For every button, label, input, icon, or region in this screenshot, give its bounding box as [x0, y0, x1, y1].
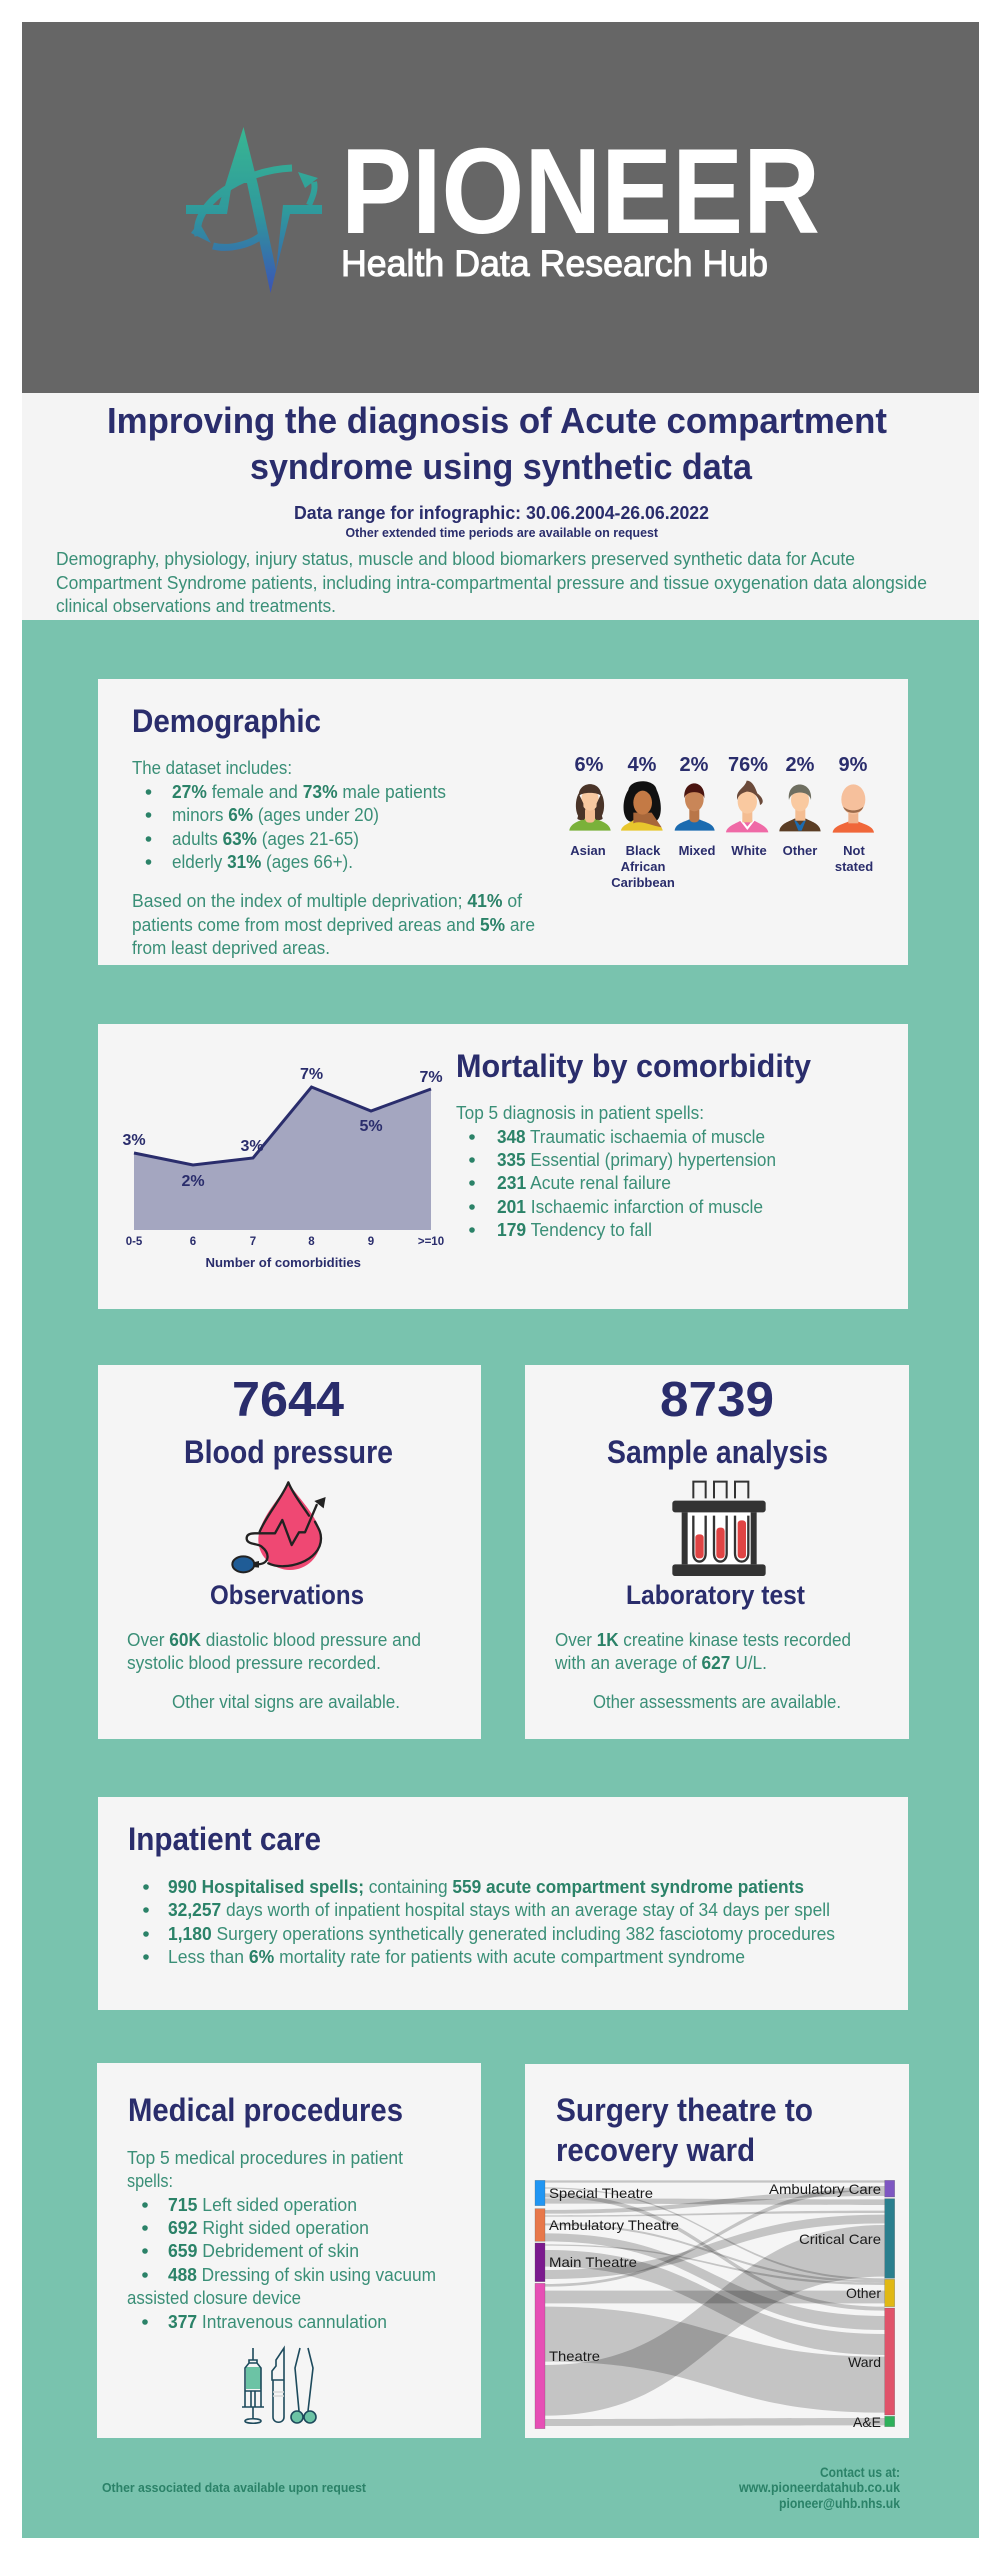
diagnosis list: 201 Ischaemic infarction of muscle [497, 1197, 763, 1217]
ethnicity labels [570, 843, 873, 890]
procedures list: 692 Right sided operation [168, 2218, 369, 2238]
diagnosis list: 335 Essential (primary) hypertension [497, 1150, 776, 1170]
inpatient list: 990 Hospitalised spells; containing 559 acute compartment syndrome patients [168, 1877, 804, 1897]
area chart: 8 [308, 1236, 315, 1248]
deprivation text: patients come from most deprived areas and 5% are [132, 915, 535, 935]
sankey labels: Ambulatory Theatre [549, 2217, 679, 2233]
area chart: 2% [181, 1173, 205, 1190]
header banner [22, 22, 979, 393]
procedures list: 377 Intravenous cannulation [168, 2312, 387, 2332]
sankey labels: A&E [853, 2414, 881, 2430]
observations text [127, 1630, 421, 1712]
dataset list: The dataset includes: [132, 758, 292, 778]
laboratory text: Over 1K creatine kinase tests recorded [555, 1630, 851, 1650]
deprivation text: Based on the index of multiple deprivation; 41% of [132, 891, 523, 911]
data range: Other extended time periods are available on request [346, 525, 659, 540]
ethnicity labels: Black [626, 843, 661, 858]
contact details: pioneer@uhb.nhs.uk [779, 2496, 900, 2511]
panel: mortality by comorbidity [98, 1024, 908, 1309]
deprivation text: from least deprived areas. [132, 938, 330, 958]
icon: surgical instruments [242, 2348, 316, 2423]
data range: Data range for infographic: 30.06.2004-26.06.2022 [294, 503, 709, 523]
ethnicity labels: Other [783, 843, 817, 858]
area chart: 6 [190, 1236, 196, 1248]
ethnicity labels: White [731, 843, 767, 858]
sankey diagram [535, 2180, 895, 2430]
ethnicity labels: stated [835, 859, 873, 874]
sankey links [545, 2180, 885, 2426]
area chart: 3% [240, 1138, 264, 1155]
area chart: 7 [250, 1236, 256, 1248]
ethnicity labels: African [621, 859, 665, 874]
procedures list: Top 5 medical procedures in patient [127, 2148, 403, 2168]
icon: pioneer logo mark [186, 127, 322, 293]
heading: surgery theatre [556, 2092, 813, 2168]
ethnicity labels: Mixed [679, 843, 715, 858]
intro paragraph [56, 549, 927, 616]
icon: test tube rack [672, 1482, 766, 1576]
heading: surgery theatre: recovery ward [556, 2132, 755, 2168]
area chart: 7% [300, 1066, 323, 1083]
panel: surgery theatre to recovery ward [525, 2064, 909, 2438]
dataset list: minors 6% (ages under 20) [172, 805, 379, 825]
ethnicity percentages: 4% [628, 754, 657, 776]
observations text: systolic blood pressure recorded. [127, 1653, 381, 1673]
procedures list: 715 Left sided operation [168, 2195, 357, 2215]
procedures list: 488 Dressing of skin using vacuum [168, 2265, 436, 2285]
teal background panel [22, 620, 979, 2538]
inpatient list [143, 1877, 835, 1967]
ethnicity percentages: 76% [728, 754, 768, 776]
contact details: www.pioneerdatahub.co.uk [738, 2480, 900, 2495]
laboratory text: Other assessments are available. [593, 1692, 841, 1712]
procedures list: assisted closure device [127, 2288, 301, 2308]
observations text: Other vital signs are available. [172, 1692, 400, 1712]
subheading: laboratory test: Laboratory test [626, 1580, 805, 1610]
sankey labels: Critical Care [799, 2231, 881, 2247]
heading: mortality: Mortality by comorbidity [456, 1048, 811, 1084]
area chart: >=10 [418, 1236, 444, 1248]
inpatient list: Less than 6% mortality rate for patients with acute compartment syndrome [168, 1947, 745, 1967]
intro paragraph: Compartment Syndrome patients, including intra-compartmental pressure and tissue oxygenation data alongside [56, 573, 927, 593]
sankey nodes [535, 2180, 895, 2429]
laboratory text: with an average of 627 U/L. [554, 1653, 767, 1673]
panel: demographic [98, 679, 908, 965]
area chart: 5% [359, 1118, 383, 1135]
sankey labels [549, 2181, 881, 2430]
inpatient list: 32,257 days worth of inpatient hospital stays with an average stay of 34 days per spell [168, 1900, 830, 1920]
ethnicity percentages: 2% [786, 754, 815, 776]
sankey labels: Ambulatory Care [769, 2181, 881, 2197]
laboratory text [554, 1630, 851, 1712]
footer note: Other associated data available upon request [102, 2480, 367, 2495]
area chart [122, 1066, 444, 1270]
area chart: 0-5 [126, 1236, 143, 1248]
ethnicity percentages [575, 754, 868, 776]
dataset list: 27% female and 73% male patients [172, 782, 446, 802]
heading: blood pressure: Blood pressure [184, 1434, 393, 1470]
title [107, 400, 887, 487]
ethnicity percentages: 6% [575, 754, 604, 776]
panel: blood pressure [98, 1365, 481, 1739]
title: Improving the diagnosis of Acute compartment [107, 400, 887, 441]
procedures list [127, 2148, 436, 2332]
heading: sample analysis: Sample analysis [607, 1434, 828, 1470]
logo wordmark: Health Data Research Hub [341, 243, 768, 284]
title: syndrome using synthetic data [250, 446, 753, 487]
sankey labels: Theatre [549, 2348, 600, 2364]
observations text: Over 60K diastolic blood pressure and [127, 1630, 421, 1650]
sankey labels: Special Theatre [549, 2185, 653, 2201]
icon: blood drop with pressure cuff [232, 1482, 326, 1572]
stat: 7644: 7644 [232, 1373, 344, 1427]
heading: inpatient care: Inpatient care [128, 1821, 321, 1857]
diagnosis list: 231 Acute renal failure [497, 1173, 671, 1193]
panel: medical procedures [97, 2063, 481, 2438]
diagnosis list [456, 1103, 776, 1240]
inpatient list: 1,180 Surgery operations synthetically generated including 382 fasciotomy procedures [168, 1924, 835, 1944]
sankey labels: Ward [848, 2354, 881, 2370]
subheading: observations: Observations [210, 1580, 364, 1610]
contact details: Contact us at: [820, 2465, 900, 2480]
diagnosis list: 348 Traumatic ischaemia of muscle [497, 1127, 765, 1147]
logo wordmark: PIONEER [341, 123, 820, 259]
diagnosis list: Top 5 diagnosis in patient spells: [456, 1103, 704, 1123]
ethnicity labels: Asian [570, 843, 606, 858]
sankey labels: Other [846, 2285, 881, 2301]
procedures list: spells: [127, 2171, 173, 2191]
diagnosis list: 179 Tendency to fall [497, 1220, 652, 1240]
dataset list: elderly 31% (ages 66+). [172, 852, 353, 872]
ethnicity percentages: 2% [680, 754, 709, 776]
intro panel [22, 393, 979, 620]
contact details [738, 2465, 900, 2511]
stat: 8739: 8739 [660, 1373, 774, 1427]
sankey labels: Main Theatre [549, 2254, 637, 2270]
dataset list: adults 63% (ages 21-65) [172, 829, 359, 849]
icons: people [569, 781, 874, 833]
area chart: 9 [368, 1236, 374, 1248]
data range [294, 503, 709, 540]
ethnicity labels: Not [843, 843, 865, 858]
intro paragraph: Demography, physiology, injury status, muscle and blood biomarkers preserved synthetic data for Acute [56, 549, 855, 569]
deprivation text [132, 891, 535, 958]
ethnicity percentages: 9% [839, 754, 868, 776]
intro paragraph: clinical observations and treatments. [56, 596, 336, 616]
dataset list [132, 758, 446, 872]
ethnicity labels: Caribbean [611, 875, 675, 890]
panel: inpatient care [98, 1797, 908, 2010]
area chart: 7% [419, 1069, 443, 1086]
panel: sample analysis [525, 1365, 909, 1739]
heading: surgery theatre: Surgery theatre to [556, 2092, 813, 2128]
procedures list: 659 Debridement of skin [168, 2241, 359, 2261]
heading: medical procedures: Medical procedures [128, 2092, 403, 2128]
area chart: Number of comorbidities [206, 1255, 361, 1270]
area chart: 3% [122, 1132, 146, 1149]
heading: demographic: Demographic [132, 703, 321, 739]
